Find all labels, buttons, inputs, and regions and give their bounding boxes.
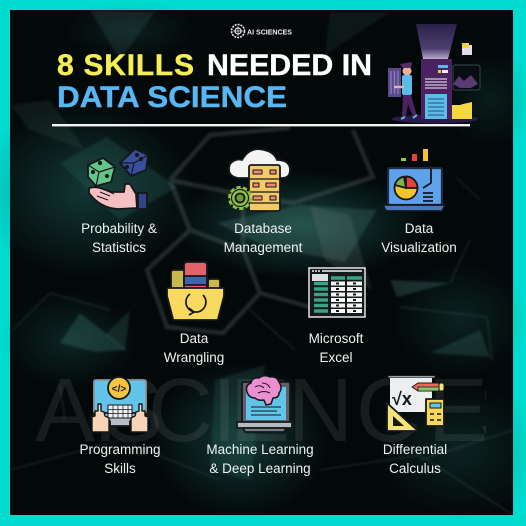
- icon: brain badge: [232, 24, 244, 38]
- icon: laptop with brain: [237, 376, 292, 432]
- label: Statistics: [92, 240, 146, 255]
- label: Wrangling: [164, 350, 224, 365]
- label: Excel: [319, 350, 353, 365]
- watermark: AI SCIENCES: AI SCIENCES: [35, 361, 526, 461]
- label: Database: [234, 221, 292, 236]
- skill: Microsoft Excel: [309, 268, 365, 365]
- title underline: [52, 124, 470, 126]
- logo: AI Sciences: [232, 24, 292, 38]
- icon: dice and hand: [88, 149, 148, 209]
- label: & Deep Learning: [209, 461, 311, 476]
- icon: laptop with pie chart: [383, 149, 445, 211]
- label: Skills: [104, 461, 136, 476]
- label: Data: [180, 331, 209, 346]
- title: DATA SCIENCE: [57, 81, 287, 114]
- label: Calculus: [389, 461, 441, 476]
- label: Microsoft: [309, 331, 364, 346]
- label: Programming: [79, 442, 161, 457]
- skill: Differential Calculus: [383, 376, 447, 476]
- skill: Probability & Statistics: [81, 149, 157, 255]
- label: Visualization: [381, 240, 457, 255]
- icon: laptop with code and hands: </>: [112, 384, 126, 395]
- skill: Data Wrangling: [164, 262, 224, 365]
- title: [57, 49, 372, 114]
- icon: folder with database: [167, 262, 224, 320]
- skill: Programming Skills: [79, 377, 161, 476]
- skill: Machine Learning & Deep Learning: [206, 376, 314, 476]
- icon: board, set square and calculator: √x: [392, 389, 412, 409]
- skill: Database Management: [224, 149, 303, 255]
- icon: cloud server and gear: [229, 149, 290, 211]
- label: Machine Learning: [206, 442, 314, 457]
- label: Differential: [383, 442, 447, 457]
- label: Data: [405, 221, 434, 236]
- title: NEEDED IN: [207, 49, 372, 82]
- label: Management: [224, 240, 303, 255]
- label: Probability &: [81, 221, 157, 236]
- logo: AI Sciences: AI SCIENCES: [247, 28, 292, 36]
- icon: spreadsheet: [309, 268, 365, 317]
- illustration: data server and person: [388, 24, 480, 124]
- skill: Data Visualization: [381, 149, 457, 255]
- title: 8 SKILLS: [57, 49, 194, 82]
